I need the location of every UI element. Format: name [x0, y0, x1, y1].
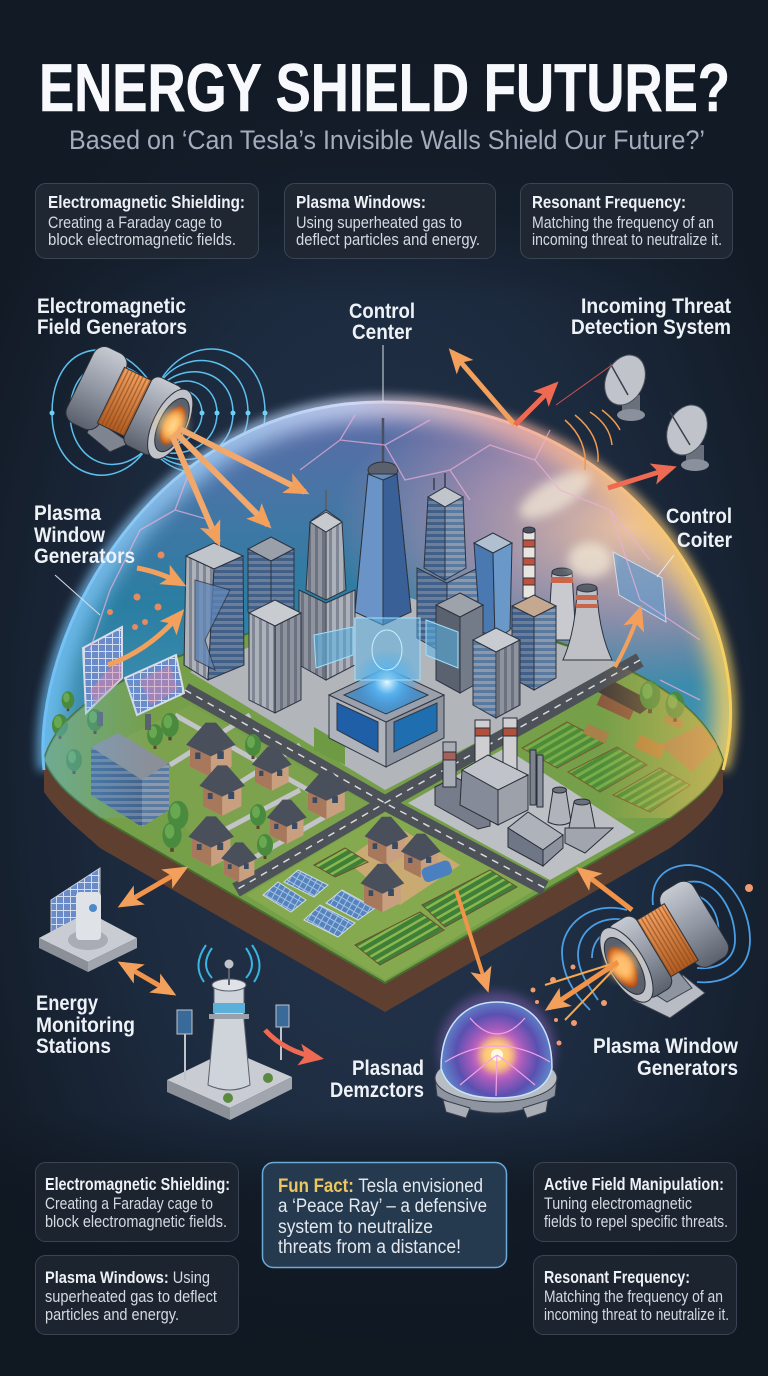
top info cards — [36, 184, 732, 258]
leader: control center top — [382, 345, 384, 402]
card: resonant frequency: incoming threat to neutralize it. — [544, 1306, 729, 1324]
callout: fun fact: Fun Fact: Tesla envisioned — [278, 1176, 483, 1197]
label: incoming threat detection system — [571, 294, 731, 339]
lens glow — [609, 952, 635, 978]
red arrow to detectors — [265, 1030, 319, 1058]
bottom farmland — [263, 817, 517, 965]
lens glow — [158, 411, 186, 439]
inner rim glow — [43, 402, 731, 770]
satellite dishes — [556, 349, 715, 471]
tall stacks — [443, 742, 456, 787]
front grey tower — [249, 600, 301, 713]
card: resonant frequency — [534, 1256, 736, 1334]
farm plaza — [246, 812, 535, 980]
label: plasma window generators left: Generators — [34, 544, 135, 568]
card: resonant frequency: Resonant Frequency: — [544, 1267, 690, 1287]
label: plasma window generators left — [34, 501, 135, 568]
stand — [633, 975, 705, 1018]
field arcs — [562, 865, 750, 1010]
plasma dome device — [435, 992, 557, 1118]
label: energy monitoring stations: Monitoring — [36, 1013, 135, 1037]
energy dome and city diorama — [43, 402, 731, 1012]
card: plasma windows: particles and energy. — [45, 1306, 179, 1324]
grass beside control center — [314, 727, 345, 765]
communication tower — [167, 945, 292, 1120]
hologram glow — [355, 650, 419, 714]
mid grey block — [436, 593, 483, 693]
generator bottom-right — [530, 865, 753, 1046]
callout: fun fact: a ‘Peace Ray’ – a defensive — [278, 1196, 487, 1217]
label: electromagnetic field generators: Field Generators — [37, 315, 187, 339]
label: plasma window generators right: Generators — [637, 1056, 738, 1080]
dome outer glow — [439, 992, 555, 1108]
threat arrows — [452, 352, 672, 488]
label: control coiter: Coiter — [677, 528, 733, 552]
card: active field manipulation: fields to repel specific threats. — [544, 1213, 728, 1231]
blue glass tower — [474, 533, 512, 640]
card: plasma windows — [284, 184, 496, 258]
card: electromagnetic shielding: block electromagnetic fields. — [45, 1213, 227, 1231]
lower left block — [435, 777, 490, 829]
blue rear tower — [248, 537, 294, 625]
platform side — [44, 760, 723, 1012]
cooling tower two — [563, 584, 612, 660]
label: control center: Center — [352, 320, 413, 344]
plasma core — [481, 1039, 513, 1071]
stepped right tower — [417, 473, 478, 655]
striped block — [512, 595, 556, 690]
card: plasma windows: superheated gas to deflect — [45, 1288, 217, 1306]
glass sphere — [441, 1002, 552, 1098]
platform ground — [44, 600, 723, 983]
label: incoming threat detection system: Detection System — [571, 315, 731, 339]
signal waves — [565, 410, 620, 470]
front right low block — [565, 828, 613, 853]
bottom band — [0, 1110, 768, 1376]
label: control coiter — [666, 504, 733, 552]
farm tan yard — [345, 825, 460, 905]
card: electromagnetic shielding — [36, 1162, 238, 1242]
right farmland — [522, 682, 718, 812]
cylinder — [588, 877, 733, 1012]
road curbs — [185, 660, 640, 890]
label: electromagnetic field generators: Electromagnetic — [37, 294, 186, 318]
sparks — [530, 884, 753, 1046]
generator field lines top-left — [50, 349, 268, 475]
cylinder — [62, 343, 204, 469]
stepped grey skyscraper — [299, 490, 355, 680]
dome interior — [43, 402, 731, 770]
cooling tower one — [548, 568, 576, 640]
card: resonant frequency: Matching the frequency of an — [532, 214, 714, 232]
subtitle: Based on ‘Can Tesla’s Invisible Walls Shield Our Future?’ — [69, 125, 705, 155]
apartment block — [91, 733, 169, 827]
control center building — [329, 668, 444, 767]
top vignette — [0, 0, 768, 300]
dish one — [597, 349, 653, 421]
dome glow — [43, 402, 731, 770]
callout: fun fact: system to neutralize — [278, 1217, 433, 1238]
label: plasnad demzctors: Demzctors — [330, 1078, 424, 1102]
front block — [508, 812, 563, 850]
factory complex — [435, 718, 613, 866]
dome rim — [43, 402, 731, 770]
solar panels inside dome — [83, 627, 184, 730]
card: plasma windows: deflect particles and energy. — [296, 231, 480, 249]
cooling towers — [548, 790, 571, 825]
warm shield glow — [43, 402, 731, 770]
label: plasnad demzctors — [330, 1056, 424, 1102]
smoke — [513, 462, 612, 578]
callout: fun fact — [262, 1162, 506, 1268]
label: energy monitoring stations: Stations — [36, 1034, 111, 1058]
label: energy monitoring stations — [36, 991, 135, 1058]
card: resonant frequency: Matching the frequency of an — [544, 1288, 723, 1306]
card: electromagnetic shielding: Creating a Faraday cage to — [45, 1195, 213, 1213]
hologram panels — [314, 618, 458, 680]
card: plasma windows: Using superheated gas to — [296, 214, 462, 232]
card: electromagnetic shielding: Electromagnetic Shielding: — [45, 1174, 230, 1194]
silos — [530, 750, 536, 805]
factory plaza — [408, 748, 635, 880]
card: electromagnetic shielding: Electromagnetic Shielding: — [48, 192, 245, 212]
central spire tower — [355, 418, 411, 625]
card: active field manipulation: Tuning electromagnetic — [544, 1195, 692, 1213]
city plaza — [190, 590, 625, 790]
card: active field manipulation: Active Field Manipulation: — [544, 1174, 724, 1194]
label: energy monitoring stations: Energy — [36, 991, 98, 1015]
neighbourhood sidewalks — [170, 715, 340, 860]
label: control center — [349, 299, 415, 344]
label: plasma window generators left: Window — [34, 523, 105, 547]
monitoring station with solar panel — [39, 868, 137, 972]
plasma particles and arrows — [107, 552, 640, 667]
dish two — [659, 399, 715, 471]
card: active field manipulation — [534, 1162, 736, 1242]
arrow into plasma device — [456, 890, 487, 988]
generator arrows — [549, 870, 632, 1008]
label: incoming threat detection system: Incoming Threat — [581, 294, 731, 318]
stand — [87, 418, 130, 452]
card: resonant frequency: incoming threat to neutralize it. — [532, 231, 722, 249]
label: control center: Control — [349, 299, 415, 323]
card: plasma windows: Plasma Windows: — [296, 192, 426, 212]
beam arrows — [172, 428, 305, 542]
card: resonant frequency: Resonant Frequency: — [532, 192, 686, 212]
card: plasma windows — [36, 1256, 238, 1334]
roads — [185, 660, 640, 890]
twisted tower — [184, 543, 244, 680]
card: electromagnetic shielding: block electromagnetic fields. — [48, 231, 236, 249]
leader: plasma window — [55, 575, 100, 615]
label: plasma window generators right: Plasma Window — [593, 1034, 738, 1058]
smokestack — [523, 527, 535, 598]
metal base — [435, 1078, 557, 1113]
glass tint over diorama — [44, 600, 723, 818]
card: electromagnetic shielding: Creating a Faraday cage to — [48, 214, 222, 232]
plasma filaments — [445, 1018, 550, 1096]
label: plasma window generators left: Plasma — [34, 501, 102, 525]
shield hexagon lines — [90, 415, 700, 700]
double arrows — [122, 869, 184, 993]
card: electromagnetic shielding — [36, 184, 258, 258]
callout: fun fact: threats from a distance! — [278, 1237, 461, 1258]
generator top-left — [62, 343, 204, 469]
label: plasnad demzctors: Plasnad — [352, 1056, 424, 1080]
label: control coiter: Control — [666, 504, 732, 528]
neighbourhood — [52, 681, 685, 882]
main block — [462, 755, 528, 790]
leader: control center right — [657, 555, 674, 577]
neighbourhood plaza — [110, 705, 370, 885]
bottom info cards — [36, 1162, 736, 1334]
card: resonant frequency — [520, 184, 732, 258]
skyline buildings — [184, 418, 612, 718]
card: plasma windows: Plasma Windows: Using — [45, 1268, 210, 1287]
front right tower — [473, 628, 520, 718]
label: plasma window generators right — [593, 1034, 738, 1080]
label: electromagnetic field generators — [37, 294, 187, 339]
floating display panel — [613, 552, 666, 622]
